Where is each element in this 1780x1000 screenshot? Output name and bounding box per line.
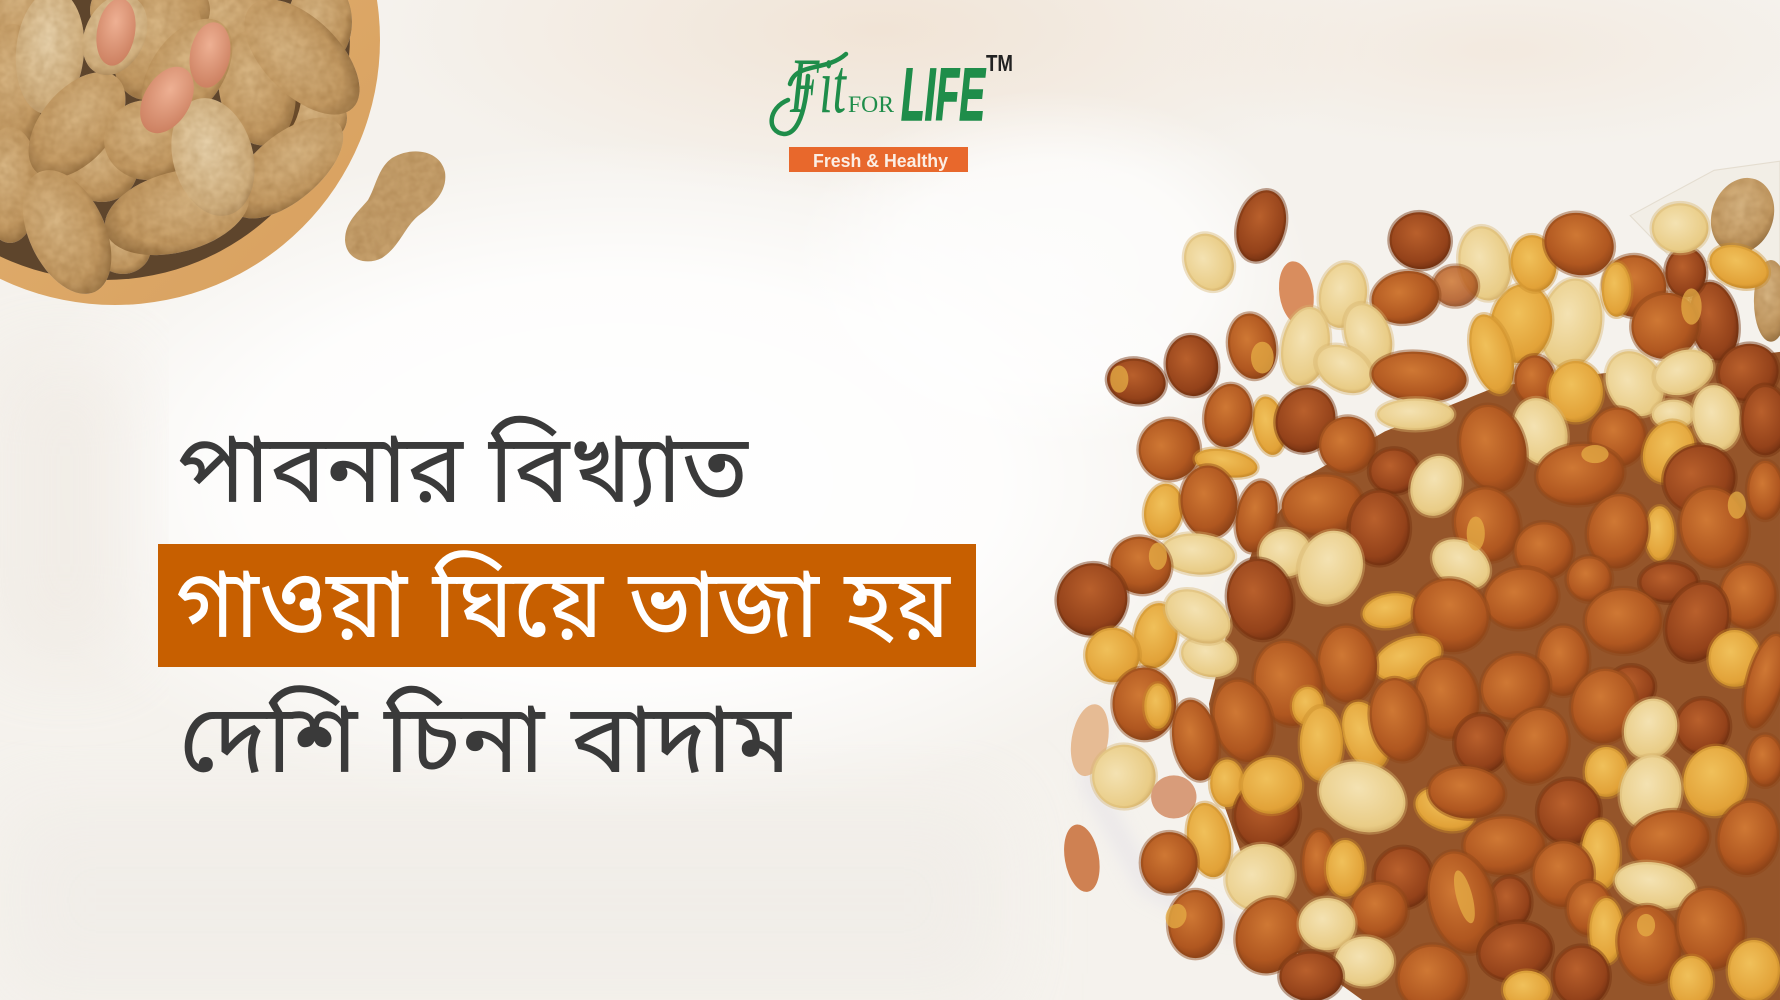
highlighted headline band: গাওয়া ঘিয়ে ভাজা হয় — [176, 550, 952, 658]
scattered and piled kernels — [1047, 185, 1780, 1000]
peanuts in bowl — [0, 0, 380, 308]
bowl rim — [0, 0, 380, 305]
logo script swash — [772, 54, 846, 134]
image: pile of roasted peanuts — [1047, 161, 1780, 1000]
logo: Fit for Life — [772, 42, 1013, 172]
logo tagline bar — [789, 147, 968, 172]
logo wordmark: LIFE: LIFE — [901, 53, 986, 136]
logo wordmark: FOR: FOR — [848, 92, 895, 117]
headline line 1: পাবনার বিখ্যাত — [178, 415, 749, 523]
paper bowl with shells, top right — [1630, 161, 1780, 342]
image: wooden bowl of shelled peanuts — [0, 0, 380, 308]
logo wordmark: Fit: Fit — [789, 42, 847, 129]
logo tagline bar: Fresh & Healthy — [813, 151, 948, 171]
peanut kernels in open shells — [91, 0, 235, 143]
headline line 3: দেশি চিনা বাদাম — [179, 685, 792, 793]
shadow under the pile — [1209, 352, 1780, 1000]
icon: single peanut beside bowl — [345, 151, 445, 261]
bowl interior — [0, 0, 350, 280]
logo trademark: TM — [986, 50, 1013, 76]
